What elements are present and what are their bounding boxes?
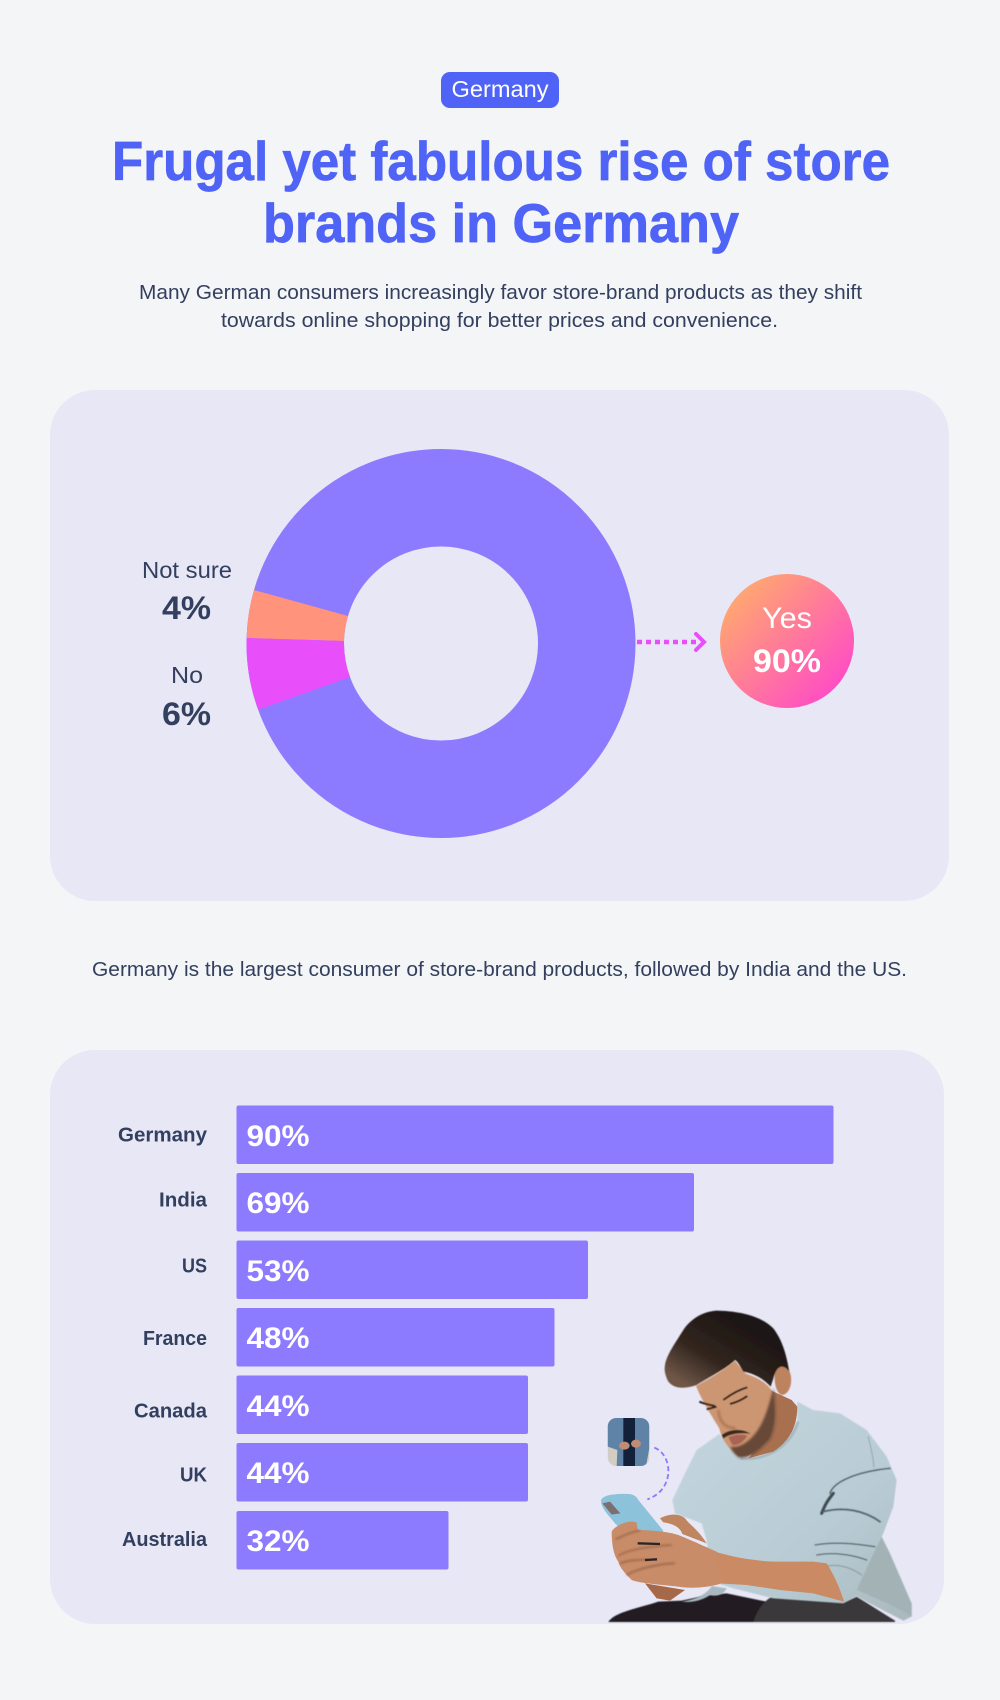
collar (740, 1422, 798, 1459)
row: US (182, 1240, 588, 1299)
hands and phone (601, 1494, 722, 1601)
forearm (715, 1552, 844, 1602)
callout: yes 90% (720, 574, 854, 708)
label: no 6% (162, 662, 211, 732)
row: UK: 44% (246, 1457, 310, 1490)
phone (601, 1494, 663, 1545)
head (665, 1311, 791, 1458)
row: India: India (159, 1190, 208, 1212)
slice: no (247, 638, 350, 710)
trousers (608, 1592, 895, 1622)
row: Germany: 90% (246, 1120, 310, 1153)
title: Frugal yet fabulous rise of store (112, 130, 890, 192)
donut chart (247, 498, 587, 789)
row: Germany (118, 1106, 834, 1164)
row: France: France (143, 1328, 207, 1350)
mustache (722, 1430, 751, 1439)
label: not sure 4% (142, 557, 232, 626)
title: brands in Germany (263, 192, 739, 254)
nose shadow (718, 1410, 736, 1428)
sleeve seam and folds (815, 1437, 890, 1575)
row: France: 48% (246, 1322, 310, 1355)
sweater (672, 1402, 912, 1621)
hair (665, 1311, 789, 1388)
subtitle: towards online shopping for better prices and convenience. (221, 309, 778, 332)
finger gaps (616, 1531, 675, 1575)
label: no 6%: No (171, 662, 203, 688)
row: Canada: 44% (246, 1390, 310, 1423)
illustration: man looking at phone (601, 1311, 912, 1622)
label: no 6%: 6% (162, 696, 211, 732)
row: UK: UK (180, 1464, 208, 1486)
face (696, 1361, 776, 1457)
thumbnail: product photo (608, 1418, 649, 1466)
row: Australia: 32% (246, 1525, 310, 1558)
wrist (645, 1583, 685, 1601)
phone between fingers (638, 1543, 660, 1560)
phone camera (602, 1502, 620, 1515)
neck (748, 1390, 797, 1458)
row: Germany: Germany (118, 1124, 208, 1146)
panel: donut chart (50, 390, 949, 901)
row: India (159, 1173, 694, 1232)
slice: not sure (247, 590, 348, 641)
row: Canada: Canada (134, 1400, 208, 1422)
row: Australia (122, 1511, 448, 1570)
sweater cuff (682, 1586, 727, 1602)
callout: yes 90%: Yes (762, 602, 812, 635)
title (112, 130, 890, 254)
row: US: US (182, 1256, 207, 1278)
beard (731, 1388, 776, 1458)
row: Australia: Australia (122, 1529, 208, 1551)
category tag: Germany: Germany (452, 76, 549, 102)
ear (775, 1365, 791, 1395)
hand (612, 1522, 722, 1588)
panel: bar chart (50, 1050, 944, 1624)
eyes and eyebrows (699, 1387, 747, 1409)
row: India: 69% (246, 1187, 310, 1220)
row: Canada (134, 1376, 528, 1434)
row: France (143, 1308, 554, 1366)
category tag: Germany (441, 72, 559, 108)
thumb (660, 1515, 707, 1543)
sleeve hem shadow (857, 1537, 912, 1617)
row: UK (180, 1443, 528, 1502)
subtitle (139, 281, 862, 332)
arrow (637, 634, 704, 650)
text block: ranking intro: Germany is the largest consumer of store-brand products, followed by India and the US. (92, 958, 907, 981)
subtitle: Many German consumers increasingly favor store-brand products as they shift (139, 281, 862, 304)
callout: yes 90%: 90% (753, 643, 821, 679)
label: not sure 4%: Not sure (142, 557, 232, 583)
label: not sure 4%: 4% (162, 590, 211, 626)
connector: dashed arc (647, 1448, 668, 1499)
row: US: 53% (246, 1255, 310, 1288)
lips (728, 1435, 747, 1445)
